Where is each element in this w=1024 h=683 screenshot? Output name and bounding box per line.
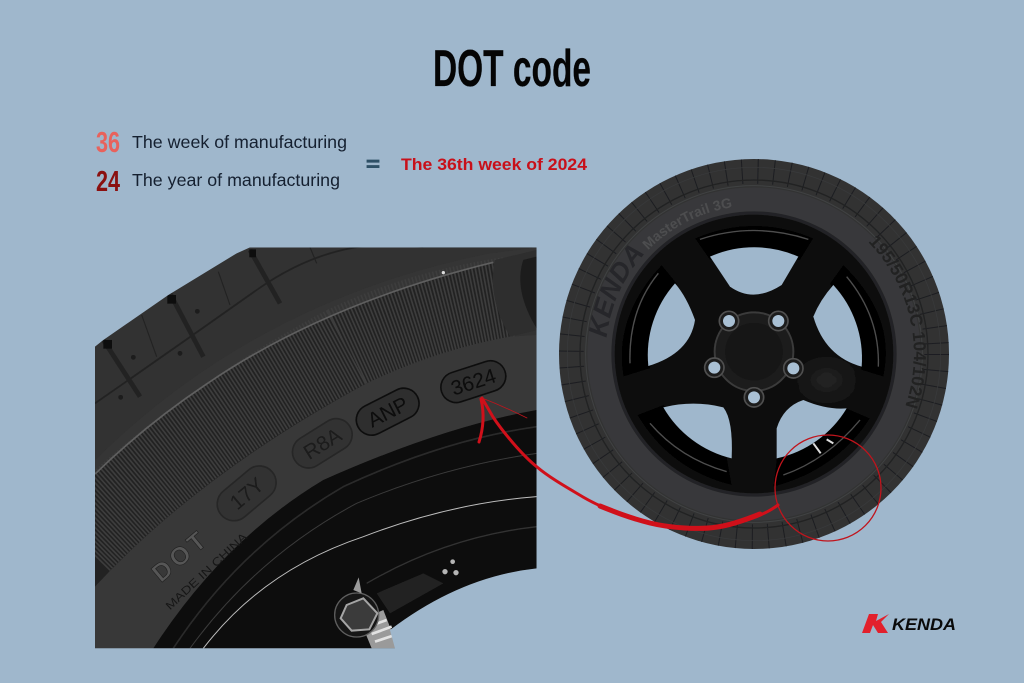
wheel nut and bolt: [335, 577, 398, 648]
spoke sheen: [807, 370, 847, 390]
sidewall text paths: [589, 198, 926, 408]
logo wordmark: KENDA: [892, 615, 956, 634]
label: week of manufacturing: The week of manufacturing: [132, 132, 347, 152]
red arrow from tyre to close-up: [479, 398, 778, 528]
tread pattern: [567, 167, 941, 541]
result text: The 36th week of 2024: [401, 156, 588, 174]
sidewall: [587, 187, 921, 521]
DOT marking: DOT: [147, 524, 215, 588]
number 36: 36: [96, 127, 120, 159]
tyre body: [559, 159, 949, 549]
legend: week and year of manufacturing: [96, 127, 347, 198]
tyre and wheel: [559, 159, 949, 549]
dot code 3624: 3624: [448, 364, 499, 400]
made in china marking: MADE IN CHINA: [164, 531, 250, 613]
factory code 17Y: 17Y: [226, 473, 269, 515]
rim: [615, 215, 893, 493]
lug holes: [705, 311, 803, 407]
tread nicks: [103, 249, 256, 400]
highlight circle around dot code: [775, 435, 881, 541]
equals sign: =: [366, 154, 380, 176]
close-up photo of tyre sidewall: [80, 245, 537, 648]
number 24: 24: [96, 166, 120, 198]
ribbed band: [80, 250, 537, 587]
logo mark: [862, 614, 889, 633]
size code R8A: R8A: [300, 424, 346, 464]
bead and rim: [153, 410, 537, 648]
size text: 195/50R13C 104/102N: [869, 236, 926, 408]
hub: [715, 312, 793, 391]
tread blocks: [95, 248, 424, 404]
plant code ANP: ANP: [364, 393, 412, 432]
Kenda logo: [862, 614, 956, 634]
rim highlights: [630, 230, 878, 475]
rim stamp dots: [377, 559, 459, 613]
title: DOT code: [433, 40, 591, 98]
smooth sidewall: [95, 335, 537, 648]
label: year of manufacturing: The year of manufacturing: [132, 170, 340, 190]
wheel windows: [648, 247, 862, 458]
brand text: KENDA MasterTrail 3G: [589, 198, 732, 338]
window recesses: [622, 226, 886, 487]
stamped code ovals: [210, 357, 510, 528]
